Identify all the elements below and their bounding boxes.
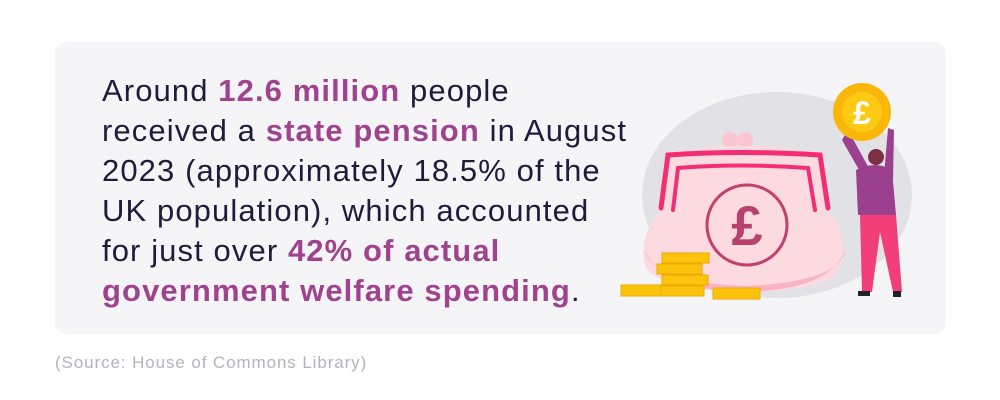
text block: statistic: received a state pension in August <box>102 113 627 148</box>
text block: statistic: 2023 (approximately 18.5% of the <box>102 153 601 188</box>
icon: coin stacks <box>621 253 760 299</box>
icon: person holding coin <box>833 83 902 297</box>
icon: pound circle <box>707 185 787 265</box>
icon: purse <box>643 132 845 292</box>
background blob <box>642 92 912 298</box>
text block: statistic: Around 12.6 million people <box>102 73 510 108</box>
icon: purse: £ <box>731 194 763 257</box>
text block: statistic <box>102 73 627 308</box>
source note: (Source: House of Commons Library) <box>55 353 367 372</box>
icon: person holding coin: £ <box>853 95 871 131</box>
text block: statistic: UK population), which accounted <box>102 193 589 228</box>
text block: statistic: government welfare spending. <box>102 273 581 308</box>
panel: card <box>55 42 946 334</box>
text block: statistic: for just over 42% of actual <box>102 233 500 268</box>
